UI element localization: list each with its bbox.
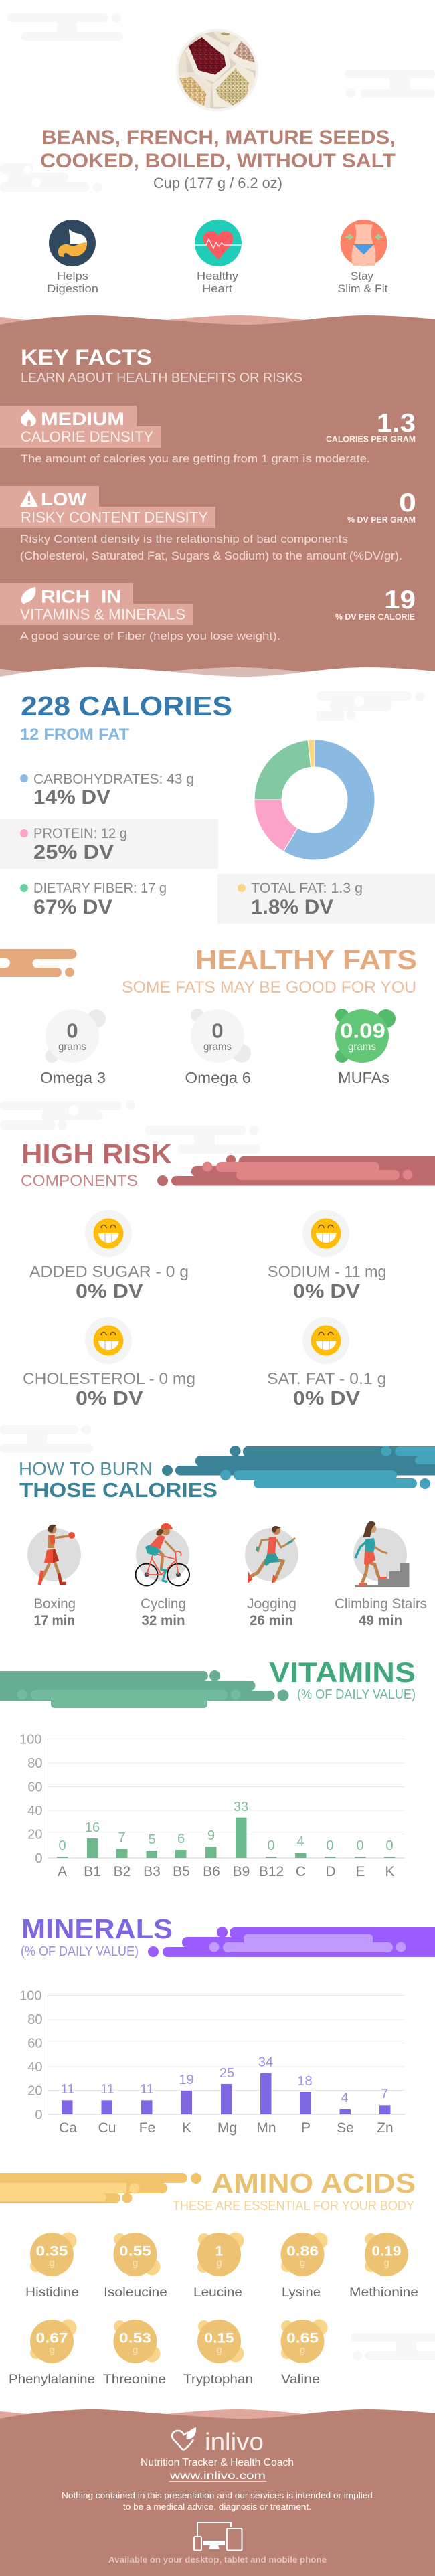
risk: saturated fat: 0% DV [293, 1388, 361, 1409]
bar chart: vitamins: 0 [267, 1838, 275, 1853]
exercise: climbing stairs: 49 min [359, 1613, 402, 1628]
bar chart: minerals: Cu [98, 2120, 116, 2136]
exercise: boxing [27, 1525, 81, 1628]
risk: cholesterol: 0% DV [76, 1388, 143, 1409]
bar chart: vitamins: 100 [19, 1732, 41, 1747]
subheading: components: COMPONENTS [21, 1172, 138, 1190]
fat: MUFAs: MUFAs [338, 1069, 389, 1086]
risk: sodium: SODIUM - 11 mg [268, 1263, 387, 1281]
bar chart: minerals: 4 [341, 2091, 349, 2106]
amino acid: valine: Valine [281, 2373, 320, 2387]
bar chart: vitamins: 6 [177, 1832, 185, 1847]
background clouds: header [0, 13, 435, 192]
amino acid: phenylalanine: 0.67 [36, 2330, 68, 2346]
bar chart: minerals: 20 [27, 2084, 43, 2099]
subheading: vitamins: (% OF DAILY VALUE) [297, 1687, 416, 1702]
availability note: Available on your desktop, tablet and mobile phone [108, 2555, 327, 2565]
bar chart: vitamins: 0 [356, 1838, 364, 1853]
bar chart: minerals: Fe [139, 2120, 155, 2136]
amino acid: isoleucine: g [133, 2257, 138, 2269]
fact: low risky content density: (Cholesterol, Saturated Fat, Sugars & Sodium) to the amount (%DV/gr). [20, 549, 402, 562]
bar chart: minerals: Mg [217, 2120, 237, 2136]
fat: omega 3: grams [58, 1041, 86, 1053]
fact: rich in vitamins and minerals: VITAMINS & MINERALS [20, 606, 185, 622]
exercise: cycling: 32 min [142, 1613, 185, 1628]
bar chart: vitamins: 80 [27, 1756, 43, 1771]
benefit: helps digestion: Helps [57, 270, 88, 282]
fact: medium calorie density: The amount of calories you are getting from 1 gram is moderate. [21, 452, 370, 465]
fat: omega 6 [185, 1009, 251, 1086]
amino acid: lysine: Lysine [282, 2286, 321, 2300]
risk: sodium [268, 1210, 387, 1302]
benefit: healthy heart: Healthy [197, 270, 239, 282]
bar chart: minerals: 40 [27, 2060, 43, 2075]
hero photo: sacks of beans [176, 29, 259, 112]
bar chart: vitamins: B9 [233, 1864, 250, 1879]
amino acid: tryptophan: Tryptophan [183, 2373, 253, 2387]
subheading: amino acids: THESE ARE ESSENTIAL FOR YOUR BODY [173, 2199, 414, 2213]
bar chart: vitamins: C [296, 1864, 306, 1879]
legend row: protein [0, 819, 218, 869]
legend row: dietary fiber: 67% DV [33, 896, 112, 918]
fact: rich in vitamins and minerals: A good source of Fiber (helps you lose weight). [20, 630, 280, 642]
bar chart: minerals: 0 [35, 2108, 43, 2122]
legend row: protein: PROTEIN: 12 g [33, 826, 127, 841]
logo: inlivo: inlivo [205, 2428, 264, 2455]
amino acid: threonine: g [133, 2344, 138, 2356]
fat: omega 6: 0 [211, 1019, 224, 1043]
bar chart: vitamins: 33 [234, 1800, 248, 1814]
legend row: total fat: TOTAL FAT: 1.3 g [251, 881, 363, 896]
amino acid: lysine: 0.86 [286, 2243, 319, 2259]
fact: low risky content density: Risky Content density is the relationship of bad components [20, 533, 348, 545]
legend row: carbohydrates [20, 772, 194, 808]
amino acid: histidine: Histidine [25, 2286, 79, 2300]
bar chart: vitamins: 0 [35, 1851, 43, 1866]
legend row: dietary fiber: DIETARY FIBER: 17 g [33, 881, 167, 896]
amino acid: leucine [193, 2233, 244, 2300]
bar chart: vitamins: 20 [27, 1827, 43, 1842]
fat: MUFAs: grams [348, 1041, 376, 1053]
decoration: vitamins banner [0, 1670, 289, 1708]
panel: footer [0, 2409, 435, 2576]
amino acid: leucine: g [216, 2257, 222, 2269]
decoration: healthy fats banner [0, 949, 77, 977]
fact: rich in vitamins and minerals: 19 [384, 586, 416, 614]
amino acid: lysine: g [300, 2257, 305, 2269]
risk: added sugar [29, 1210, 189, 1302]
background cloud: burn [0, 1425, 93, 1453]
fat: omega 6: Omega 6 [185, 1069, 251, 1086]
title [40, 126, 396, 172]
bar chart: minerals: Zn [377, 2120, 394, 2136]
title: COOKED, BOILED, WITHOUT SALT [40, 150, 396, 172]
risk: saturated fat [267, 1317, 387, 1409]
benefit: stay slim and fit [337, 220, 388, 295]
bar chart: vitamins: 16 [85, 1820, 100, 1835]
fact: low risky content density: LOW [41, 489, 87, 509]
bar chart: minerals: 19 [179, 2073, 194, 2087]
exercise: jogging [245, 1526, 298, 1628]
fact: low risky content density: % DV PER GRAM [347, 515, 416, 525]
legend row: carbohydrates: CARBOHYDRATES: 43 g [33, 772, 194, 787]
risk: cholesterol: CHOLESTEROL - 0 mg [23, 1370, 195, 1388]
subheading: key facts: LEARN ABOUT HEALTH BENEFITS OR RISKS [21, 371, 302, 385]
amino acid: histidine: 0.35 [36, 2243, 68, 2259]
bar chart: vitamins: 5 [148, 1832, 156, 1847]
subheading: calories from fat: 12 FROM FAT [20, 725, 129, 744]
heading: those calories: THOSE CALORIES [19, 1478, 217, 1502]
amino acid: lysine [281, 2233, 328, 2300]
background cloud: calories [317, 691, 424, 721]
fat: omega 3 [40, 1009, 106, 1086]
amino acid: phenylalanine: Phenylalanine [9, 2373, 95, 2387]
fact: rich in vitamins and minerals: RICH IN [41, 586, 121, 606]
donut chart: calorie sources [254, 740, 375, 860]
bar chart: minerals: Se [337, 2120, 354, 2136]
amino acid: phenylalanine [9, 2320, 95, 2387]
website link: www.inlivo.com [169, 2470, 266, 2482]
bar chart: vitamins [19, 1732, 405, 1879]
legend row: total fat [217, 874, 435, 924]
heading: how to burn: HOW TO BURN [19, 1458, 153, 1479]
benefit: helps digestion: Digestion [47, 282, 98, 295]
fact: medium calorie density: CALORIE DENSITY [21, 428, 153, 445]
fact: low risky content density: RISKY CONTENT DENSITY [21, 509, 208, 526]
subheading: healthy fats: SOME FATS MAY BE GOOD FOR YOU [122, 978, 416, 997]
bar chart: vitamins: B2 [114, 1864, 130, 1879]
bar chart: minerals: 11 [61, 2082, 74, 2097]
amino acid: methionine: g [383, 2257, 389, 2269]
exercise: boxing: 17 min [33, 1613, 75, 1628]
logo: inlivo [172, 2427, 264, 2455]
legend row: dietary fiber [20, 881, 167, 918]
bar chart: minerals: Mn [256, 2120, 276, 2136]
disclaimer: Nothing contained in this presentation and our services is intended or implied [62, 2490, 373, 2500]
disclaimer [62, 2490, 373, 2512]
bar chart: vitamins: B6 [203, 1864, 220, 1879]
exercise: boxing: Boxing [33, 1596, 76, 1612]
fact: medium calorie density: CALORIES PER GRAM [326, 434, 416, 444]
icon: grinning emoji [311, 1218, 341, 1249]
tagline: Nutrition Tracker & Health Coach [141, 2457, 294, 2468]
bar chart: vitamins: 40 [27, 1804, 43, 1818]
bar chart: minerals: 34 [258, 2055, 273, 2069]
bar chart: vitamins: D [325, 1864, 336, 1879]
bar chart: vitamins: 9 [207, 1828, 215, 1843]
heading: vitamins: VITAMINS [269, 1656, 416, 1688]
exercise: jogging: Jogging [247, 1596, 296, 1612]
bar chart: minerals: Ca [59, 2120, 77, 2136]
bar chart: minerals: 80 [27, 2012, 43, 2027]
amino acid: threonine [103, 2320, 166, 2387]
decoration: high risk banner [157, 1155, 435, 1186]
subheading: minerals: (% OF DAILY VALUE) [21, 1944, 139, 1959]
risk: sodium: 0% DV [293, 1281, 361, 1302]
exercise: cycling: Cycling [141, 1596, 186, 1612]
bar chart: minerals: 11 [100, 2082, 114, 2097]
amino acid: phenylalanine: g [49, 2344, 55, 2356]
background clouds: high risk [0, 1100, 261, 1154]
bar chart: minerals: K [182, 2120, 191, 2136]
fact: rich in vitamins and minerals [0, 583, 416, 642]
amino acid: threonine: 0.53 [119, 2330, 151, 2346]
amino acid: methionine: Methionine [349, 2286, 418, 2300]
bar chart: vitamins: 0 [326, 1838, 334, 1853]
decoration: minerals banner [148, 1927, 435, 1957]
amino acid: isoleucine: 0.55 [119, 2243, 151, 2259]
benefit: stay slim and fit: Stay [351, 270, 373, 282]
bar chart: minerals: 25 [220, 2066, 234, 2081]
amino acid: methionine [349, 2233, 418, 2300]
bar chart: vitamins: 0 [385, 1838, 394, 1853]
benefit: healthy heart: Heart [202, 282, 232, 295]
heading: minerals: MINERALS [21, 1913, 173, 1944]
exercise: cycling [135, 1523, 189, 1628]
bar chart: vitamins: B1 [84, 1864, 101, 1879]
amino acid: tryptophan: g [216, 2344, 222, 2356]
amino acid: leucine: Leucine [193, 2286, 242, 2300]
amino acid: valine [281, 2320, 328, 2387]
decoration: burn banner [162, 1446, 435, 1489]
icon: grinning emoji [94, 1325, 123, 1356]
amino acid: histidine: g [49, 2257, 55, 2269]
amino acid: leucine: 1 [215, 2243, 224, 2259]
fact: rich in vitamins and minerals: % DV PER CALORIE [335, 612, 415, 622]
bar chart: vitamins: 0 [58, 1838, 66, 1853]
fact: medium calorie density: 1.3 [377, 409, 416, 438]
panel: key facts [0, 315, 435, 677]
background cloud: amino acids [351, 2333, 435, 2360]
bar chart: vitamins: K [385, 1864, 395, 1879]
heading: calories: 228 CALORIES [21, 691, 232, 721]
benefit: helps digestion [47, 220, 98, 295]
title: BEANS, FRENCH, MATURE SEEDS, [41, 126, 396, 149]
fact: medium calorie density: MEDIUM [41, 409, 124, 429]
amino acid: methionine: 0.19 [372, 2243, 402, 2259]
risk: added sugar: 0% DV [76, 1281, 143, 1302]
risk: cholesterol [23, 1317, 195, 1409]
heading: healthy fats: HEALTHY FATS [195, 944, 417, 975]
fact: low risky content density [0, 486, 416, 562]
icon: grinning emoji [311, 1325, 341, 1356]
icon: devices [194, 2522, 242, 2550]
legend row: protein: 25% DV [33, 841, 114, 863]
serving size: Cup (177 g / 6.2 oz) [153, 175, 282, 191]
amino acid: isoleucine: Isoleucine [104, 2286, 167, 2300]
amino acid: threonine: Threonine [103, 2373, 166, 2387]
amino acid: valine: 0.65 [286, 2330, 319, 2346]
bar chart: vitamins: 60 [27, 1780, 43, 1795]
legend row: total fat: 1.8% DV [251, 896, 333, 918]
exercise: climbing stairs: Climbing Stairs [335, 1596, 427, 1612]
heading: key facts: KEY FACTS [21, 345, 152, 369]
bar chart: minerals: 100 [19, 1989, 41, 2004]
exercise: climbing stairs [335, 1521, 427, 1628]
benefit: healthy heart [195, 220, 242, 295]
heading: high risk: HIGH RISK [21, 1138, 172, 1169]
legend row: carbohydrates: 14% DV [33, 786, 110, 808]
bar chart: vitamins: E [355, 1864, 365, 1879]
amino acid: tryptophan: 0.15 [205, 2330, 234, 2346]
bar chart: minerals [19, 1989, 405, 2136]
bar chart: vitamins: B3 [143, 1864, 161, 1879]
fat: omega 3: Omega 3 [40, 1069, 106, 1086]
amino acid: valine: g [300, 2344, 305, 2356]
heading: amino acids: AMINO ACIDS [211, 2168, 416, 2199]
amino acid: histidine [25, 2233, 79, 2300]
fat: omega 6: grams [203, 1041, 232, 1053]
icon: grinning emoji [94, 1218, 123, 1249]
fat: MUFAs [335, 1009, 396, 1086]
decoration: amino acids banner [0, 2173, 201, 2203]
fat: MUFAs: 0.09 [340, 1019, 385, 1043]
benefit: stay slim and fit: Slim & Fit [337, 282, 388, 295]
bar chart: vitamins: 7 [118, 1830, 126, 1845]
risk: saturated fat: SAT. FAT - 0.1 g [267, 1370, 387, 1388]
bar chart: vitamins: B5 [173, 1864, 190, 1879]
bar chart: minerals: P [301, 2120, 311, 2136]
bar chart: vitamins: B12 [259, 1864, 284, 1879]
amino acid: tryptophan [183, 2320, 253, 2387]
bar chart: vitamins: A [58, 1864, 67, 1879]
disclaimer: to be a medical advice, diagnosis or treatment. [123, 2502, 311, 2512]
fat: omega 3: 0 [66, 1019, 78, 1043]
risk: added sugar: ADDED SUGAR - 0 g [29, 1263, 189, 1281]
bar chart: minerals: 60 [27, 2036, 43, 2051]
bar chart: minerals: 18 [297, 2074, 313, 2089]
amino acid: isoleucine [104, 2233, 167, 2300]
exercise: jogging: 26 min [250, 1613, 293, 1628]
bar chart: minerals: 7 [381, 2087, 388, 2101]
bar chart: minerals: 11 [140, 2082, 154, 2097]
bar chart: vitamins: 4 [296, 1834, 304, 1849]
fact: low risky content density: 0 [399, 489, 416, 517]
fact: medium calorie density [0, 406, 416, 465]
